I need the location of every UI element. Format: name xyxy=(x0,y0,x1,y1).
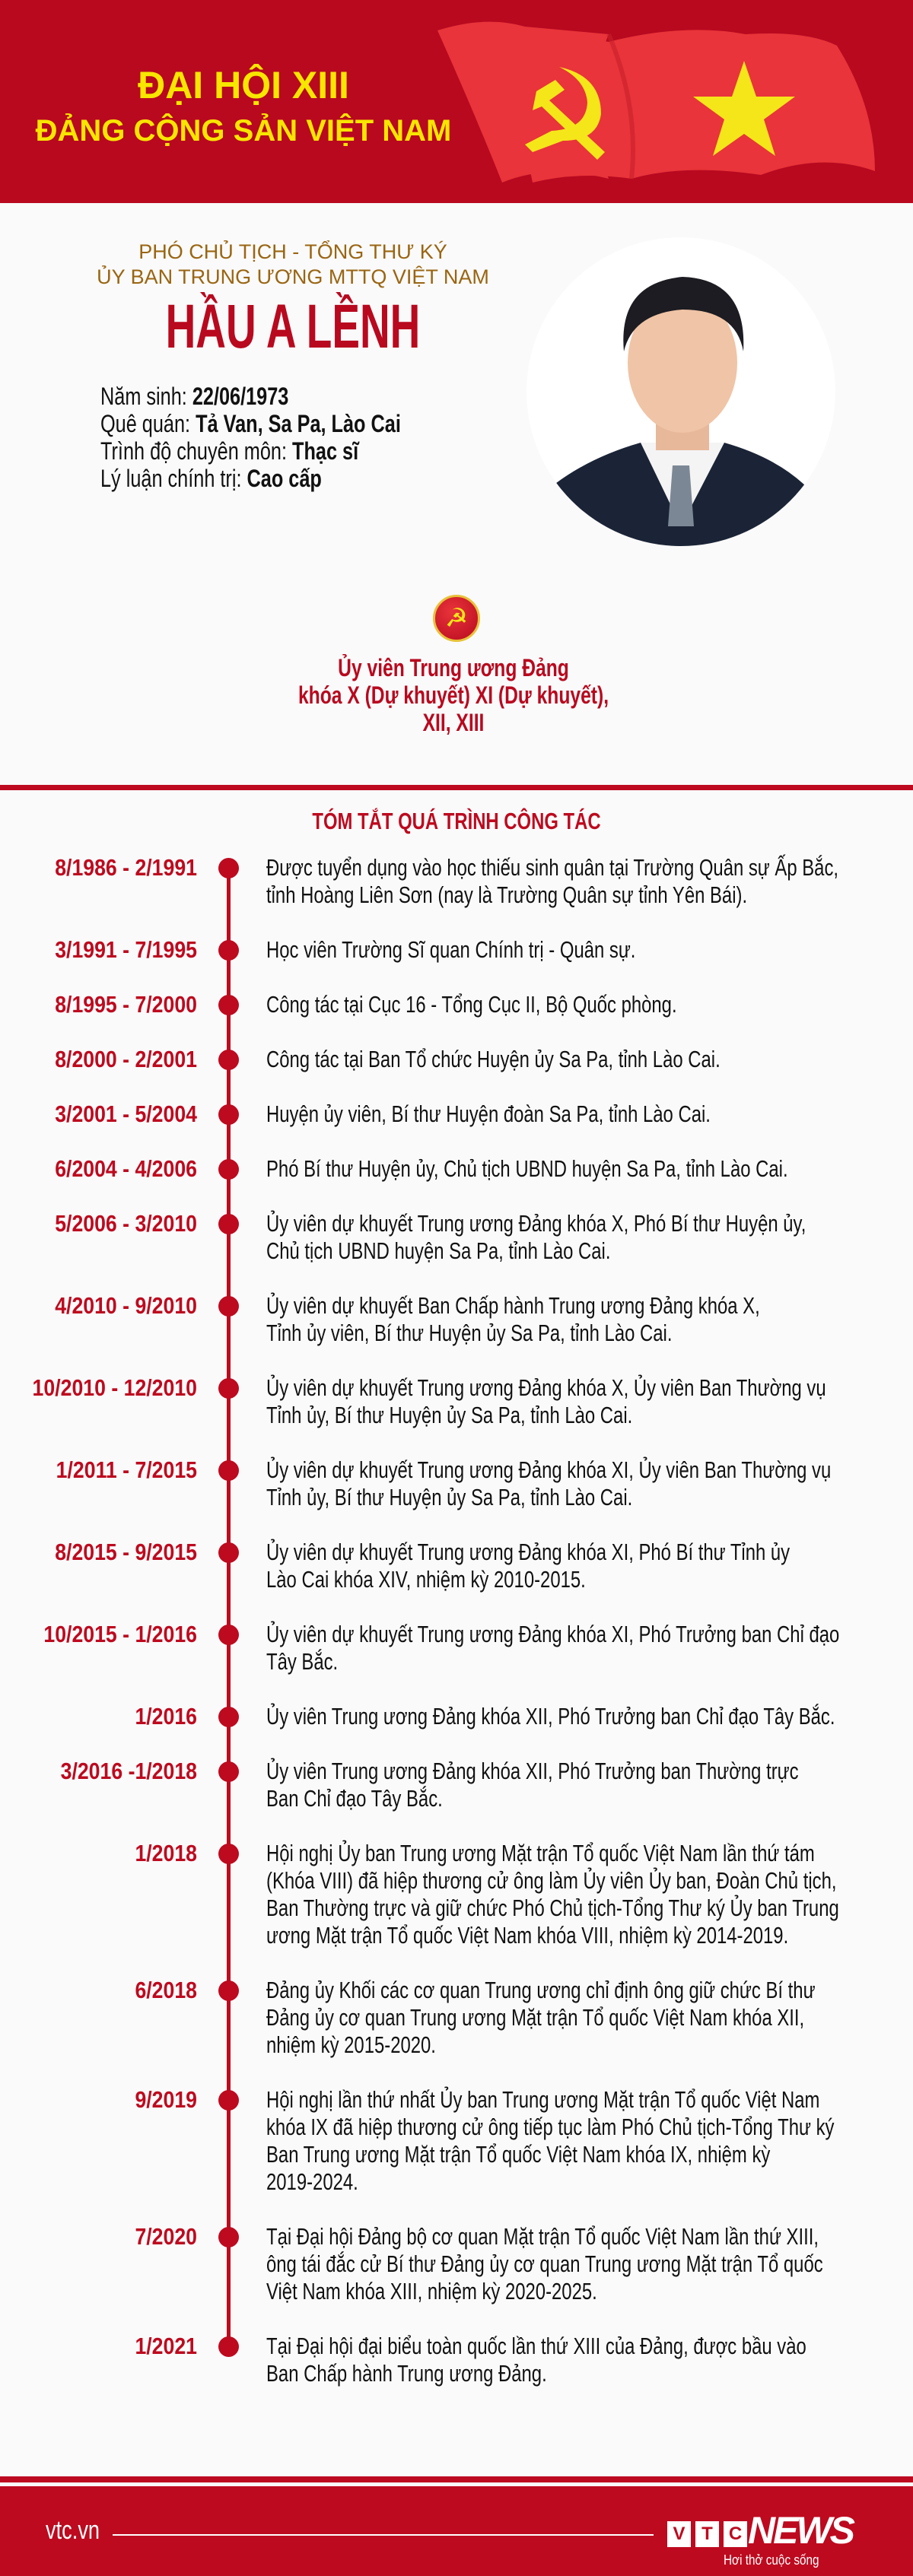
divider rule xyxy=(0,785,913,790)
entry 2021: Tại Đại hội đại biểu toàn quốc lần thứ XIII của Đảng, được bầu vào xyxy=(266,2333,806,2359)
entry 1/2018: ương Mặt trận Tổ quốc Việt Nam khóa VIII, nhiệm kỳ 2014-2019. xyxy=(266,1922,788,1949)
entry 2001: 3/2001 - 5/2004 xyxy=(55,1101,197,1127)
personal info: Lý luận chính trị: Cao cấp xyxy=(100,465,322,492)
icon: hammer and sickle xyxy=(525,67,605,160)
entry 2000: Công tác tại Ban Tổ chức Huyện ủy Sa Pa, tỉnh Lào Cai. xyxy=(266,1046,721,1072)
entry 1991: 3/1991 - 7/1995 xyxy=(55,936,197,963)
entry 1986 xyxy=(55,854,838,908)
entry 6/2018 xyxy=(135,1977,816,2058)
entry 1995: Công tác tại Cục 16 - Tổng Cục II, Bộ Quốc phòng. xyxy=(266,991,677,1018)
timeline axis xyxy=(227,868,231,2344)
entry 2011 xyxy=(56,1456,831,1510)
entry 2019 xyxy=(135,2086,835,2195)
entry 6/2018: Đảng ủy cơ quan Trung ương Mặt trận Tổ quốc Việt Nam khóa XII, xyxy=(266,2004,804,2031)
entry 2021: 1/2021 xyxy=(135,2333,197,2359)
personal info: Trình độ chuyên môn: Thạc sĩ xyxy=(100,437,358,465)
entry 6/2018: nhiệm kỳ 2015-2020. xyxy=(266,2031,436,2058)
entry 1986: tỉnh Hoàng Liên Sơn (nay là Trường Quân sự tỉnh Yên Bái). xyxy=(266,881,747,908)
logo: VTC News: Hơi thở cuộc sống xyxy=(724,2552,819,2568)
entry 10/2010: Ủy viên dự khuyết Trung ương Đảng khóa X, Ủy viên Ban Thường vụ xyxy=(266,1374,826,1401)
entry 2020: Việt Nam khóa XIII, nhiệm kỳ 2020-2025. xyxy=(266,2278,597,2304)
entry 2011: 1/2011 - 7/2015 xyxy=(56,1456,197,1483)
entry 1995: 8/1995 - 7/2000 xyxy=(55,991,197,1018)
logo: VTC News: V xyxy=(673,2524,685,2544)
entry 2020 xyxy=(135,2223,823,2304)
entry 6/2018: Đảng ủy Khối các cơ quan Trung ương chỉ định ông giữ chức Bí thư xyxy=(266,1977,816,2003)
entry 2020: ông tái đắc cử Bí thư Đảng ủy cơ quan Trung ương Mặt trận Tổ quốc xyxy=(266,2250,823,2277)
entry 2006 xyxy=(55,1210,806,1264)
footer xyxy=(0,2486,913,2576)
entry 2019: khóa IX đã hiệp thương cử ông tiếp tục làm Phó Chủ tịch-Tổng Thư ký xyxy=(266,2114,835,2140)
entry 3/2016: Ban Chỉ đạo Tây Bắc. xyxy=(266,1785,443,1812)
entry 10/2010 xyxy=(33,1374,826,1428)
membership text: Ủy viên Trung ương Đảng xyxy=(338,654,569,681)
logo: VTC News: T xyxy=(701,2524,713,2544)
entry 2020: Tại Đại hội Đảng bộ cơ quan Mặt trận Tổ quốc Việt Nam lần thứ XIII, xyxy=(266,2223,819,2250)
entry 1/2018: (Khóa VIII) đã hiệp thương cử ông làm Ủy viên Ủy ban, Đoàn Chủ tịch, xyxy=(266,1867,837,1894)
membership text xyxy=(298,654,609,736)
logo: VTC News xyxy=(667,2509,855,2568)
entry 1/2018: Hội nghị Ủy ban Trung ương Mặt trận Tổ quốc Việt Nam lần thứ tám xyxy=(266,1840,815,1866)
entry 1/2018: Ban Thường trực và giữ chức Phó Chủ tịch-Tổng Thư ký Ủy ban Trung xyxy=(266,1895,839,1921)
entry 2004: 6/2004 - 4/2006 xyxy=(55,1155,197,1182)
membership text: XII, XIII xyxy=(423,709,484,736)
entry 2000: 8/2000 - 2/2001 xyxy=(55,1046,197,1072)
entry 1986: Được tuyển dụng vào học thiếu sinh quân tại Trường Quân sự Ấp Bắc, xyxy=(266,854,838,881)
entry 1991: Học viên Trường Sĩ quan Chính trị - Quân sự. xyxy=(266,936,635,963)
logo: VTC News: C xyxy=(729,2524,742,2544)
subtitle position: PHÓ CHỦ TỊCH - TỔNG THƯ KÝ xyxy=(138,240,447,263)
timeline heading: TÓM TẮT QUÁ TRÌNH CÔNG TÁC xyxy=(312,808,601,834)
icon: party emblem: ☭ xyxy=(445,604,468,633)
entry 10/2015: Tây Bắc. xyxy=(266,1648,338,1675)
entry 1/2016: Ủy viên Trung ương Đảng khóa XII, Phó Trưởng ban Chỉ đạo Tây Bắc. xyxy=(266,1703,835,1730)
entry 10/2015: Ủy viên dự khuyết Trung ương Đảng khóa XI, Phó Trưởng ban Chỉ đạo xyxy=(266,1621,839,1647)
footer stripe xyxy=(0,2476,913,2482)
title: ĐẢNG CỘNG SẢN VIỆT NAM xyxy=(36,114,451,148)
membership text: khóa X (Dự khuyết) XI (Dự khuyết), xyxy=(298,681,609,709)
entry 10/2015 xyxy=(43,1621,839,1675)
header banner xyxy=(0,0,913,203)
entry 4/2010: 4/2010 - 9/2010 xyxy=(55,1292,197,1319)
entry 6/2018: 6/2018 xyxy=(135,1977,197,2003)
entry 2019: Ban Trung ương Mặt trận Tổ quốc Việt Nam khóa IX, nhiệm kỳ xyxy=(266,2141,770,2168)
entry 2011: Tỉnh ủy, Bí thư Huyện ủy Sa Pa, tỉnh Lào Cai. xyxy=(266,1484,632,1510)
entry 4/2010 xyxy=(55,1292,760,1346)
entry 4/2010: Ủy viên dự khuyết Ban Chấp hành Trung ương Đảng khóa X, xyxy=(266,1292,760,1319)
flags graphic xyxy=(437,21,875,183)
portrait photo xyxy=(556,277,804,546)
subtitle position: ỦY BAN TRUNG ƯƠNG MTTQ VIỆT NAM xyxy=(97,265,489,288)
entry 2001 xyxy=(55,1101,711,1127)
icon: star xyxy=(693,61,795,156)
entry 1/2016: 1/2016 xyxy=(135,1703,197,1730)
title xyxy=(35,64,451,148)
entry 3/2016 xyxy=(61,1758,799,1812)
entry 8/2015: Ủy viên dự khuyết Trung ương Đảng khóa XI, Phó Bí thư Tỉnh ủy xyxy=(266,1539,790,1565)
personal info xyxy=(100,383,401,492)
entry 1995 xyxy=(55,991,677,1018)
footer site name: vtc.vn xyxy=(46,2516,100,2545)
entry 2001: Huyện ủy viên, Bí thư Huyện đoàn Sa Pa, tỉnh Lào Cai. xyxy=(266,1101,711,1127)
entry 2019: 9/2019 xyxy=(135,2086,197,2113)
entry 8/2015: Lào Cai khóa XIV, nhiệm kỳ 2010-2015. xyxy=(266,1566,586,1593)
entry 2006: Chủ tịch UBND huyện Sa Pa, tỉnh Lào Cai. xyxy=(266,1237,610,1264)
personal info: Năm sinh: 22/06/1973 xyxy=(100,383,288,410)
icon: party emblem xyxy=(433,595,480,642)
entry 2019: Hội nghị lần thứ nhất Ủy ban Trung ương Mặt trận Tổ quốc Việt Nam xyxy=(266,2086,819,2113)
entry 2011: Ủy viên dự khuyết Trung ương Đảng khóa XI, Ủy viên Ban Thường vụ xyxy=(266,1456,831,1483)
entry 2021: Ban Chấp hành Trung ương Đảng. xyxy=(266,2360,547,2387)
title: ĐẠI HỘI XIII xyxy=(138,64,349,106)
entry 3/2016: Ủy viên Trung ương Đảng khóa XII, Phó Trưởng ban Thường trực xyxy=(266,1758,799,1784)
entry 2006: 5/2006 - 3/2010 xyxy=(55,1210,197,1237)
entry 2020: 7/2020 xyxy=(135,2223,197,2250)
entry 8/2015 xyxy=(55,1539,790,1593)
entry 4/2010: Tỉnh ủy viên, Bí thư Huyện ủy Sa Pa, tỉnh Lào Cai. xyxy=(266,1320,672,1346)
entry 2000 xyxy=(55,1046,721,1072)
entry 1986: 8/1986 - 2/1991 xyxy=(55,854,197,881)
entry 1/2018: 1/2018 xyxy=(135,1840,197,1866)
entry 3/2016: 3/2016 -1/2018 xyxy=(61,1758,197,1784)
name heading: HẦU A LỀNH xyxy=(166,292,420,361)
entry 10/2015: 10/2015 - 1/2016 xyxy=(43,1621,197,1647)
entry 2021 xyxy=(135,2333,806,2387)
entry 1/2018 xyxy=(135,1840,839,1949)
entry 8/2015: 8/2015 - 9/2015 xyxy=(55,1539,197,1565)
personal info: Quê quán: Tả Van, Sa Pa, Lào Cai xyxy=(100,410,401,437)
entry 2006: Ủy viên dự khuyết Trung ương Đảng khóa X, Phó Bí thư Huyện ủy, xyxy=(266,1210,806,1237)
entry 10/2010: 10/2010 - 12/2010 xyxy=(33,1374,197,1401)
entry 2004: Phó Bí thư Huyện ủy, Chủ tịch UBND huyện Sa Pa, tỉnh Lào Cai. xyxy=(266,1155,788,1182)
entry 1991 xyxy=(55,936,635,963)
entry 2019: 2019-2024. xyxy=(266,2168,358,2195)
logo: VTC News: NEWS xyxy=(748,2509,853,2552)
entry 10/2010: Tỉnh ủy, Bí thư Huyện ủy Sa Pa, tỉnh Lào Cai. xyxy=(266,1402,632,1428)
subtitle position xyxy=(97,240,489,288)
